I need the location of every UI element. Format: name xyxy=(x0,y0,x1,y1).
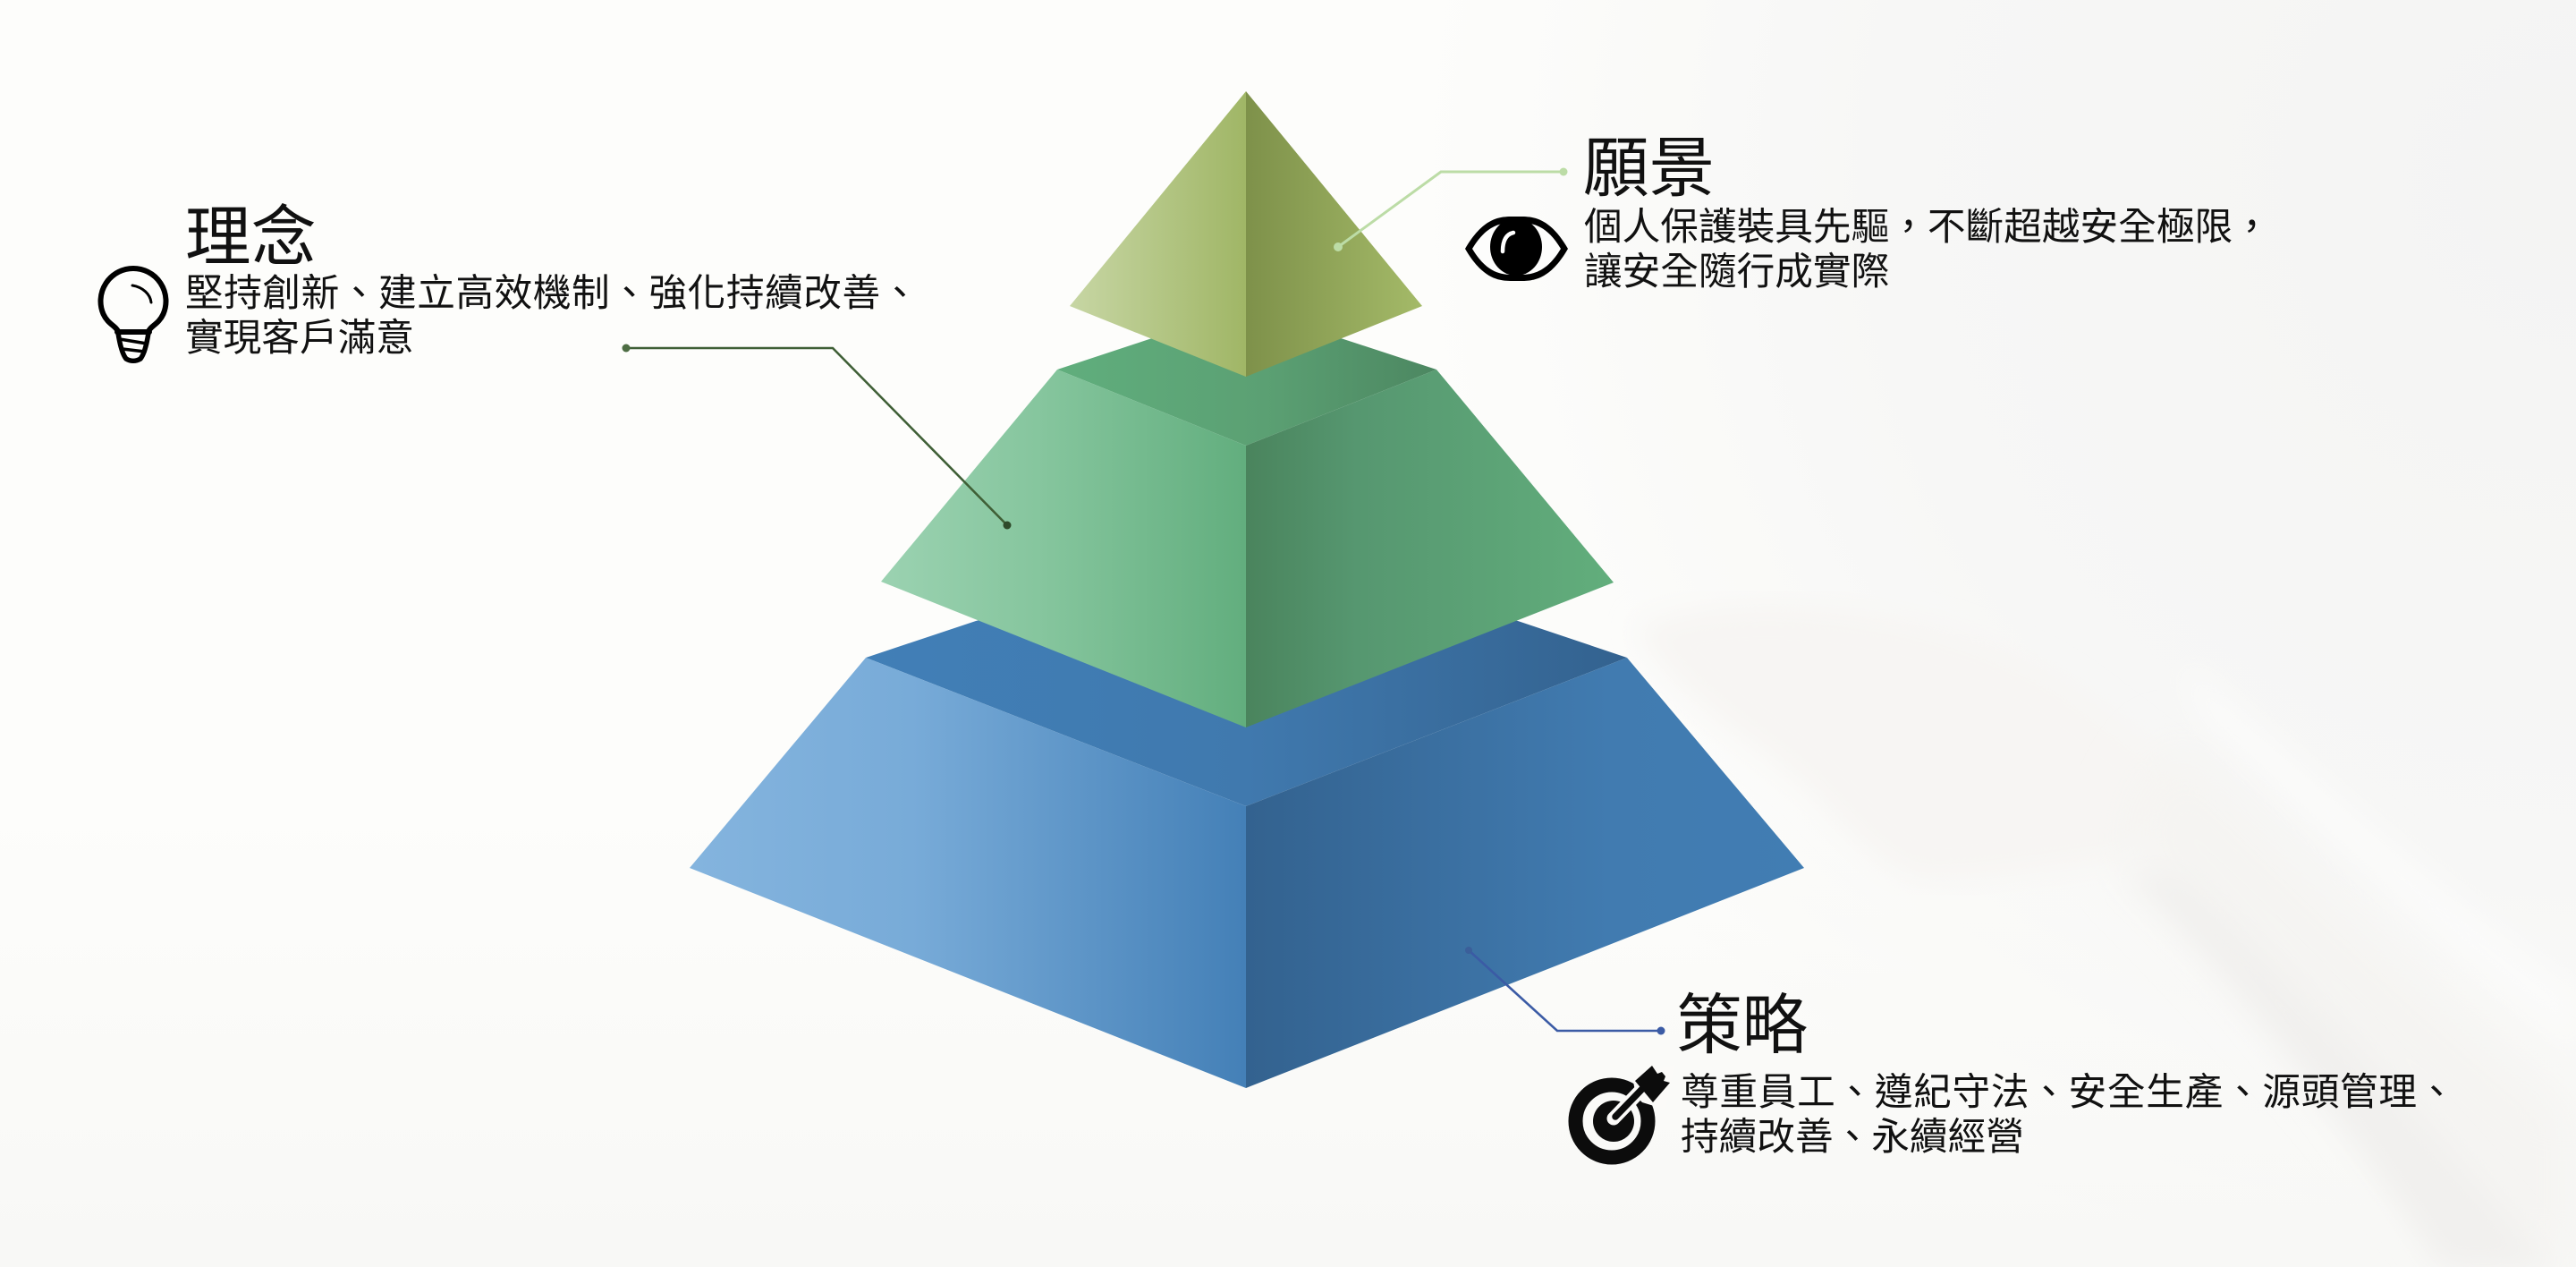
text: 策略 description: 持續改善、永續經營 xyxy=(1681,1116,2024,1159)
text: 理念 description: 堅持創新、建立高效機制、強化持續改善、 xyxy=(185,272,919,315)
text: 願景 description: 讓安全隨行成實際 xyxy=(1584,251,1889,293)
connector: 理念 xyxy=(623,344,1011,530)
text block: 理念 xyxy=(185,200,919,360)
text: 策略 description xyxy=(1681,1071,2456,1159)
text: 策略 description: 尊重員工、遵紀守法、安全生產、源頭管理、 xyxy=(1681,1071,2456,1114)
pyramid bottom tier: 策略 xyxy=(690,555,1804,1088)
text block: 策略 xyxy=(1676,988,2456,1159)
text: 願景 description xyxy=(1584,206,2271,293)
text block: 願景 xyxy=(1583,131,2271,293)
icon: light bulb xyxy=(100,268,165,361)
connector: 願景 xyxy=(1334,168,1567,251)
icon: eye xyxy=(1465,217,1568,281)
text: 理念 description: 實現客戶滿意 xyxy=(185,317,414,360)
text: 理念 description xyxy=(185,272,919,360)
heading: 願景: 願景 xyxy=(1583,131,1715,205)
heading: 理念: 理念 xyxy=(185,200,317,274)
icon: target with arrow xyxy=(1576,1065,1674,1158)
pyramid middle tier: 理念 xyxy=(881,307,1614,727)
text: 願景 description: 個人保護裝具先驅，不斷超越安全極限， xyxy=(1584,206,2271,249)
heading: 策略: 策略 xyxy=(1676,988,1808,1062)
pyramid top tier: 願景 xyxy=(1070,91,1422,377)
pyramid xyxy=(690,91,1804,1088)
connector: 策略 xyxy=(1465,947,1665,1034)
